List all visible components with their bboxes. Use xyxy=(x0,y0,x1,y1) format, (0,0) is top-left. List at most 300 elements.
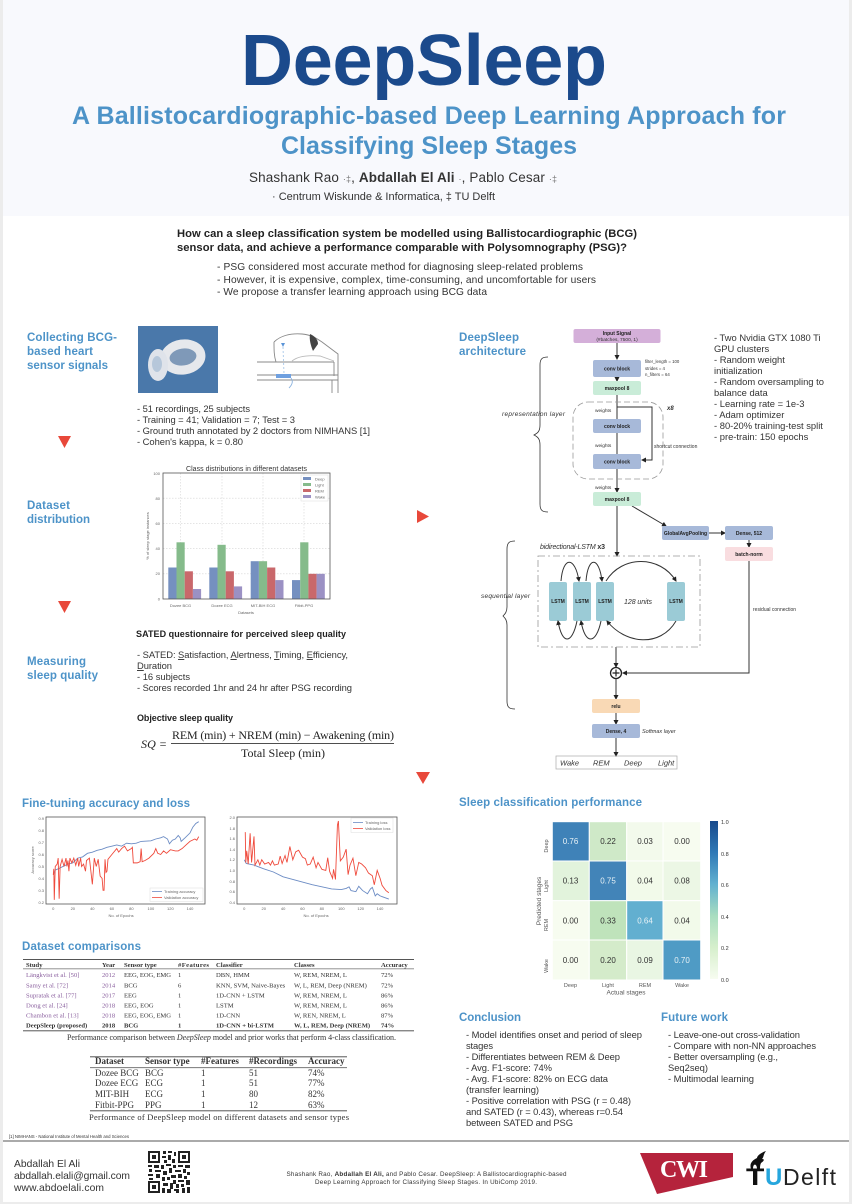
confusion matrix heatmap: Actual stages xyxy=(606,990,646,996)
table: prior work comparison: Classes xyxy=(294,962,315,969)
line chart: loss: 0.6 xyxy=(229,889,236,894)
table: prior work comparison: Sensor type xyxy=(124,962,157,969)
table: prior work comparison: 2018 xyxy=(102,1022,116,1030)
table: model performance by dataset: #Recordings xyxy=(249,1056,297,1066)
bidirectional LSTM block: LSTM xyxy=(598,599,612,605)
objective sleep quality formula: SQ = xyxy=(141,737,167,751)
introduction bullets: - We propose a transfer learning approach using BCG data xyxy=(217,287,487,298)
conclusion: - Avg. F1-score: 74% xyxy=(466,1062,552,1073)
heading: collecting signals: sensor signals xyxy=(27,360,108,372)
line chart: loss: 120 xyxy=(357,906,365,911)
global average pooling branch: Dense, 512 xyxy=(736,531,762,537)
training details bullets xyxy=(714,332,824,442)
future work xyxy=(661,1012,816,1084)
SATED text block xyxy=(136,629,352,693)
confusion matrix heatmap: 0.22 xyxy=(600,837,616,846)
sequential layer brace: sequential layer xyxy=(481,593,531,600)
table: prior work comparison: BCG xyxy=(124,1022,138,1030)
training details bullets: - 80-20% training-test split xyxy=(714,420,823,431)
training details bullets: initialization xyxy=(714,365,762,376)
global average pooling branch: GlobalAvgPooling xyxy=(664,531,707,537)
table: model performance by dataset xyxy=(89,1056,349,1122)
table: model performance by dataset: 74% xyxy=(308,1068,325,1078)
line chart: accuracy: 0.3 xyxy=(38,888,45,893)
header band xyxy=(3,0,849,216)
arrow: down 1 xyxy=(58,436,71,448)
line chart: loss: 1.0 xyxy=(229,868,236,873)
confusion matrix heatmap: 0.04 xyxy=(637,876,653,886)
conclusion: - Differentiates between REM & Deep xyxy=(466,1051,620,1062)
confusion matrix heatmap: Wake xyxy=(544,959,550,973)
sensor data bullets: - Training = 41; Validation = 7; Test = 3 xyxy=(137,414,295,425)
line chart: accuracy: 80 xyxy=(129,906,134,911)
contact details xyxy=(13,1159,130,1194)
line chart: accuracy: 20 xyxy=(71,906,76,911)
table: model performance by dataset: 82% xyxy=(308,1089,325,1099)
input signal block: (#batches, 7500, 1) xyxy=(596,337,638,343)
illustration: person on bed with sensor xyxy=(257,334,338,393)
table: prior work comparison: 2014 xyxy=(102,982,116,990)
line chart: loss: 60 xyxy=(300,906,305,911)
bar chart: class distributions: Fitbit-PPG xyxy=(295,603,313,608)
QR code xyxy=(148,1151,190,1193)
residual repeat box: conv block xyxy=(604,460,630,466)
line chart: loss xyxy=(229,815,397,918)
bar chart: class distributions: 80 xyxy=(156,496,161,501)
heading: collecting signals xyxy=(27,332,117,372)
bidirectional LSTM block: LSTM xyxy=(669,599,683,605)
table: prior work comparison: DBN, HMM xyxy=(216,972,250,979)
table: prior work comparison: 1 xyxy=(178,1022,181,1030)
line chart: loss: 20 xyxy=(261,906,267,911)
table: prior work comparison: EEG xyxy=(124,992,137,1000)
sensor data bullets: - Ground truth annotated by 2 doctors from NIMHANS [1] xyxy=(137,425,370,436)
confusion matrix heatmap: 0.8 xyxy=(721,852,729,858)
confusion matrix heatmap: 0.08 xyxy=(674,876,690,886)
confusion matrix heatmap: 0.03 xyxy=(637,837,653,846)
line chart: accuracy xyxy=(30,816,205,918)
heading: dataset distribution: distribution xyxy=(27,514,90,526)
arrow: down 2 xyxy=(58,601,71,613)
confusion matrix heatmap: 0.33 xyxy=(600,916,616,926)
table: prior work comparison: 1 xyxy=(178,972,181,979)
table: prior work comparison: Chambon et al. [13] xyxy=(26,1012,79,1020)
output classes: Light xyxy=(658,758,675,768)
heading: sleep classification: Sleep classification performance xyxy=(459,797,642,809)
table: prior work comparison: 1 xyxy=(178,1002,181,1010)
line chart: accuracy: 60 xyxy=(110,906,115,911)
line chart: accuracy: 0.4 xyxy=(38,876,45,881)
introduction bullets xyxy=(217,262,596,298)
table: prior work comparison xyxy=(23,959,414,1042)
table: model performance by dataset: Performance of DeepSleep model on different datasets and sensor types xyxy=(89,1112,349,1122)
conv block with parameters: conv block xyxy=(604,366,630,372)
table: prior work comparison: 87% xyxy=(381,1012,394,1020)
table: model performance by dataset: 1 xyxy=(201,1078,206,1088)
table: model performance by dataset: Dozee ECG xyxy=(95,1078,139,1088)
table: model performance by dataset: BCG xyxy=(145,1068,164,1078)
heading: measuring sleep quality: Measuring xyxy=(27,656,86,668)
bar chart: class distributions: Dozee ECG xyxy=(211,603,233,608)
confusion matrix heatmap: 1.0 xyxy=(721,820,729,826)
bidirectional LSTM block: LSTM xyxy=(551,599,565,605)
conclusion xyxy=(459,1012,642,1128)
global average pooling branch xyxy=(662,526,796,613)
bar chart: class distributions: Light xyxy=(315,482,325,488)
future work: - Multimodal learning xyxy=(668,1073,754,1084)
confusion matrix heatmap: Light xyxy=(544,880,550,892)
bar chart: class distributions: REM xyxy=(315,488,324,494)
table: prior work comparison: W, REM, NREM, L xyxy=(294,972,347,979)
bar chart: class distributions xyxy=(145,466,330,615)
line chart: loss: 1.4 xyxy=(229,847,236,852)
confusion matrix heatmap: REM xyxy=(639,983,652,989)
bar chart: class distributions: 100 xyxy=(153,471,161,476)
table: model performance by dataset: Fitbit-PPG xyxy=(95,1100,135,1110)
table: prior work comparison: Dong et al. [24] xyxy=(26,1002,68,1010)
future work: Future work xyxy=(661,1012,729,1024)
table: model performance by dataset: ECG xyxy=(145,1089,164,1099)
table: prior work comparison: 72% xyxy=(381,972,394,979)
line chart: accuracy: 0.6 xyxy=(38,852,45,857)
maxpool block top xyxy=(593,381,641,395)
contact details: www.abdoelali.com xyxy=(13,1183,104,1194)
logo: TU Delft: Delft xyxy=(783,1164,837,1190)
bar chart: class distributions: Class distributions in different datasets xyxy=(186,466,308,473)
confusion matrix heatmap: Deep xyxy=(544,839,550,853)
conclusion: between SATED and PSG xyxy=(466,1117,573,1128)
logo: CWI xyxy=(640,1153,733,1194)
training details bullets: - Adam optimizer xyxy=(714,409,784,420)
global average pooling branch: residual connection xyxy=(753,607,796,613)
bar chart: class distributions: 40 xyxy=(156,546,161,551)
table: prior work comparison: W, L, REM, Deep (NREM) xyxy=(294,1022,370,1030)
heading: dataset comparisons: Dataset comparisons xyxy=(22,941,141,953)
heading: architecture xyxy=(459,332,526,358)
table: model performance by dataset: 1 xyxy=(201,1068,206,1078)
contact details: Abdallah El Ali xyxy=(14,1159,80,1170)
table: prior work comparison: Year xyxy=(102,962,115,969)
representation layer brace xyxy=(502,357,566,512)
future work: - Better oversampling (e.g., xyxy=(668,1051,778,1062)
line chart: loss: 0 xyxy=(243,906,246,911)
bar chart: class distributions: % of sleep stage instances xyxy=(145,512,150,560)
sensor data bullets: - Cohen's kappa, k = 0.80 xyxy=(137,436,243,447)
table: prior work comparison: 2017 xyxy=(102,992,116,1000)
table: model performance by dataset: Sensor type xyxy=(145,1056,190,1066)
heading: fine tuning: Fine-tuning accuracy and loss xyxy=(22,798,190,810)
bar chart: class distributions: Wake xyxy=(315,494,326,500)
table: prior work comparison: 1D-CNN + bi-LSTM xyxy=(216,1022,275,1030)
confusion matrix heatmap: 0.64 xyxy=(637,916,653,926)
table: prior work comparison: 74% xyxy=(381,1022,394,1030)
output classes xyxy=(556,756,677,769)
bidirectional LSTM block xyxy=(538,544,700,647)
bar chart: class distributions: 60 xyxy=(156,521,161,526)
line chart: accuracy: 0.8 xyxy=(38,828,45,833)
heading: collecting signals: Collecting BCG- xyxy=(27,332,117,344)
confusion matrix heatmap: 0.13 xyxy=(563,876,579,886)
table: model performance by dataset: ECG xyxy=(145,1078,164,1088)
confusion matrix heatmap: 0.2 xyxy=(721,946,729,952)
residual repeat box: x8 xyxy=(666,406,674,412)
confusion matrix heatmap: 0.00 xyxy=(563,916,579,926)
conclusion: (transfer learning) xyxy=(466,1084,539,1095)
input signal block: Input Signal xyxy=(603,331,632,337)
research question: sensor data, and achieve a performance comparable with Polysomnography (PSG)? xyxy=(177,242,627,254)
residual repeat box: shortcut connection xyxy=(654,444,698,450)
bar chart: class distributions: Deep xyxy=(315,476,325,482)
training details bullets: GPU clusters xyxy=(714,343,770,354)
conv block with parameters: n_filters = 64 xyxy=(645,372,670,377)
line chart: accuracy: 100 xyxy=(148,906,155,911)
line chart: accuracy: 40 xyxy=(90,906,95,911)
table: prior work comparison: #Features xyxy=(178,962,209,969)
confusion matrix heatmap: Deep xyxy=(564,983,577,989)
table: prior work comparison: W, REM, NREM, L xyxy=(294,1002,347,1010)
maxpool block bottom xyxy=(593,485,641,506)
bar chart: class distributions: 0 xyxy=(158,596,161,602)
sensor data bullets xyxy=(137,403,370,447)
training details bullets: - Learning rate = 1e-3 xyxy=(714,398,804,409)
table: prior work comparison: W, REN, NREM, L xyxy=(294,1012,346,1020)
heading: dataset distribution: Dataset xyxy=(27,500,70,512)
bidirectional LSTM block: bidirectional-LSTM x3 xyxy=(540,544,605,551)
line chart: loss: 0.8 xyxy=(229,879,236,884)
table: model performance by dataset: Accuracy xyxy=(308,1056,345,1066)
input signal block xyxy=(574,329,660,343)
confusion matrix heatmap: 0.75 xyxy=(600,876,616,886)
training details bullets: - Random oversampling to xyxy=(714,376,824,387)
confusion matrix heatmap xyxy=(536,820,729,996)
line chart: loss: 1.2 xyxy=(229,857,236,862)
future work: - Compare with non-NN approaches xyxy=(668,1040,816,1051)
conclusion: Conclusion xyxy=(459,1012,521,1024)
confusion matrix heatmap: Light xyxy=(602,983,614,989)
residual repeat box: weights xyxy=(595,443,612,449)
table: model performance by dataset: Dataset xyxy=(95,1056,124,1066)
arrow: right xyxy=(417,510,429,523)
introduction bullets: - PSG considered most accurate method for diagnosing sleep-related problems xyxy=(217,262,583,273)
confusion matrix heatmap: REM xyxy=(544,918,550,931)
table: prior work comparison: DeepSleep (proposed) xyxy=(26,1022,87,1030)
research question: How can a sleep classification system be modelled using Ballistocardiographic (BCG) xyxy=(177,228,637,240)
table: prior work comparison: EEG, EOG, EMG xyxy=(124,1012,171,1020)
table: model performance by dataset: PPG xyxy=(145,1100,162,1110)
citation: Deep Learning Approach for Classifying Sleep Stages. In UbiComp 2019. xyxy=(315,1179,537,1186)
table: prior work comparison: 2012 xyxy=(102,972,115,979)
line chart: loss: No. of Epochs xyxy=(303,913,329,918)
table: model performance by dataset: 1 xyxy=(201,1100,206,1110)
authors: Shashank Rao ·‡, Abdallah El Ali ·, Pablo Cesar ·‡ xyxy=(249,170,557,185)
bar chart: class distributions: Dozee BCG xyxy=(170,603,191,608)
conclusion: stages xyxy=(466,1040,493,1051)
confusion matrix heatmap: 0.70 xyxy=(674,956,690,965)
SATED text block: - SATED: Satisfaction, Alertness, Timing, Efficiency, xyxy=(137,649,348,660)
add node xyxy=(610,668,622,678)
table: prior work comparison: 1D-CNN + LSTM xyxy=(216,992,265,1000)
confusion matrix heatmap: 0.20 xyxy=(600,956,616,965)
table: prior work comparison: 1 xyxy=(178,992,181,1000)
line chart: accuracy: Training accuracy xyxy=(164,889,195,894)
table: prior work comparison: 2018 xyxy=(102,1002,116,1010)
subtitle: Classifying Sleep Stages xyxy=(281,132,577,160)
bidirectional LSTM block: LSTM xyxy=(575,599,589,605)
sequential layer brace xyxy=(481,541,531,709)
table: model performance by dataset: 51 xyxy=(249,1068,258,1078)
heading: dataset distribution xyxy=(27,500,90,526)
table: prior work comparison: 72% xyxy=(381,982,394,990)
logo: TU Delft: U xyxy=(765,1164,782,1191)
table: prior work comparison: 86% xyxy=(381,992,394,1000)
table: prior work comparison: 86% xyxy=(381,1002,394,1010)
heading: measuring sleep quality xyxy=(27,656,99,682)
conv block with parameters: strides = 4 xyxy=(645,366,666,371)
line chart: accuracy: 0.9 xyxy=(38,816,45,821)
residual repeat box: conv block xyxy=(604,424,630,430)
representation layer brace: representation layer xyxy=(502,411,566,418)
line chart: accuracy: 0.2 xyxy=(38,900,45,905)
SATED text block: - Scores recorded 1hr and 24 hr after PSG recording xyxy=(137,682,352,693)
table: model performance by dataset: 63% xyxy=(308,1100,325,1110)
table: prior work comparison: 1 xyxy=(178,1012,181,1020)
softmax dense block: Softmax layer xyxy=(642,729,677,735)
objective sleep quality formula xyxy=(137,713,394,760)
conv block with parameters xyxy=(593,359,680,377)
table: model performance by dataset: 51 xyxy=(249,1078,258,1088)
table: prior work comparison: EEG, EOG, EMG xyxy=(124,972,171,979)
softmax dense block xyxy=(592,724,677,738)
table: prior work comparison: W, L, REM, Deep (NREM) xyxy=(294,982,367,990)
conclusion: - Model identifies onset and period of sleep xyxy=(466,1029,642,1040)
logo: CWI: CWI xyxy=(660,1157,708,1183)
table: model performance by dataset: 1 xyxy=(201,1089,206,1099)
table: prior work comparison: Classifier xyxy=(216,962,243,969)
table: prior work comparison: Accuracy xyxy=(381,962,408,969)
subtitle: A Ballistocardiographic-based Deep Learning Approach for xyxy=(72,102,786,130)
introduction bullets: - However, it is expensive, complex, time-consuming, and uncomfortable for users xyxy=(217,275,596,286)
line chart: loss: 80 xyxy=(320,906,325,911)
heading: architecture: architecture xyxy=(459,346,526,358)
maxpool block bottom: weights xyxy=(595,485,612,491)
confusion matrix heatmap: 0.76 xyxy=(563,837,579,846)
table: model performance by dataset: Dozee BCG xyxy=(95,1068,139,1078)
line chart: accuracy: 0 xyxy=(52,906,55,911)
table: prior work comparison: 1D-CNN xyxy=(216,1012,240,1020)
confusion matrix heatmap: 0.6 xyxy=(721,883,729,889)
confusion matrix heatmap: 0.04 xyxy=(674,916,690,926)
architecture diagram xyxy=(481,329,796,769)
relu block xyxy=(592,699,640,713)
future work: - Leave-one-out cross-validation xyxy=(668,1029,800,1040)
line chart: loss: Training loss xyxy=(365,820,388,825)
confusion matrix heatmap: Predicted stages xyxy=(536,876,543,925)
line chart: loss: 1.6 xyxy=(229,836,236,841)
residual repeat box xyxy=(573,402,698,479)
objective sleep quality formula: Total Sleep (min) xyxy=(241,746,325,760)
line chart: loss: 40 xyxy=(281,906,286,911)
sensor data bullets: - 51 recordings, 25 subjects xyxy=(137,403,250,414)
conclusion: and SATED (r = 0.43), whereas r=0.54 xyxy=(466,1106,623,1117)
bar chart: class distributions: Datasets xyxy=(238,610,254,615)
maxpool block top: maxpool 8 xyxy=(605,386,630,392)
table: prior work comparison: Study xyxy=(26,962,43,969)
heading: measuring sleep quality: sleep quality xyxy=(27,670,99,682)
table: prior work comparison: W, REM, NREM, L xyxy=(294,992,347,1000)
output classes: Deep xyxy=(624,758,642,768)
line chart: accuracy: No. of Epochs xyxy=(108,913,134,918)
contact details: abdallah.elali@gmail.com xyxy=(14,1171,130,1182)
table: prior work comparison: 2018 xyxy=(102,1012,116,1020)
future work: Seq2seq) xyxy=(668,1062,708,1073)
softmax dense block: Dense, 4 xyxy=(606,729,626,735)
objective sleep quality formula: REM (min) + NREM (min) − Awakening (min) xyxy=(172,728,394,742)
table: prior work comparison: Längkvist et al. [50] xyxy=(26,972,79,979)
objective sleep quality formula: Objective sleep quality xyxy=(137,713,233,723)
photo: BCG sensor xyxy=(138,326,218,393)
confusion matrix heatmap: 0.00 xyxy=(674,837,690,846)
table: prior work comparison: 6 xyxy=(178,982,182,990)
confusion matrix heatmap: 0.0 xyxy=(721,978,729,984)
confusion matrix heatmap: 0.09 xyxy=(637,956,653,965)
table: model performance by dataset: #Features xyxy=(201,1056,239,1066)
authors xyxy=(249,170,557,203)
confusion matrix heatmap: 0.00 xyxy=(563,956,579,965)
line chart: accuracy: 0.5 xyxy=(38,864,45,869)
logo: TU Delft: T xyxy=(746,1163,765,1190)
footnote: [1] NIMHANS - National Institute of Mental Health and Sciences xyxy=(9,1134,129,1139)
citation xyxy=(286,1171,567,1186)
table: model performance by dataset: 80 xyxy=(249,1089,258,1099)
SATED text block: Duration xyxy=(137,660,172,671)
heading: collecting signals: based heart xyxy=(27,346,93,358)
confusion matrix heatmap: 0.4 xyxy=(721,915,729,921)
conclusion: - Positive correlation with PSG (r = 0.48) xyxy=(466,1095,631,1106)
title: DeepSleep xyxy=(241,21,607,101)
residual repeat box: weights xyxy=(595,408,612,414)
training details bullets: - pre-train: 150 epochs xyxy=(714,431,809,442)
table: model performance by dataset: MIT-BIH xyxy=(95,1089,130,1099)
SATED text block: - 16 subjects xyxy=(137,671,190,682)
line chart: accuracy: Validation accuracy xyxy=(164,895,198,900)
conclusion: - Avg. F1-score: 82% on ECG data xyxy=(466,1073,609,1084)
SATED text block: SATED questionnaire for perceived sleep quality xyxy=(136,629,346,639)
authors: · Centrum Wiskunde & Informatica, ‡ TU Delft xyxy=(272,191,495,203)
table: prior work comparison: Performance comparison between DeepSleep model and prior works that perform 4-class classification. xyxy=(67,1033,396,1042)
heading: architecture: DeepSleep xyxy=(459,332,519,344)
line chart: accuracy: 140 xyxy=(187,906,194,911)
confusion matrix heatmap: Wake xyxy=(675,983,689,989)
bar chart: class distributions: MIT-BIH ECG xyxy=(251,603,275,608)
line chart: accuracy: Accuracy score xyxy=(30,846,35,874)
line chart: accuracy: 120 xyxy=(167,906,175,911)
connectors xyxy=(616,343,749,756)
training details bullets: - Two Nvidia GTX 1080 Ti xyxy=(714,332,821,343)
line chart: accuracy: 0.7 xyxy=(38,840,45,845)
line chart: loss: 140 xyxy=(377,906,384,911)
conv block with parameters: filter_length = 100 xyxy=(645,359,680,364)
maxpool block bottom: maxpool 8 xyxy=(605,497,630,503)
logo: TU Delft xyxy=(746,1151,837,1191)
table: model performance by dataset: 12 xyxy=(249,1100,258,1110)
research question xyxy=(177,228,637,254)
relu block: relu xyxy=(611,704,621,710)
training details bullets: - Random weight xyxy=(714,354,785,365)
bidirectional LSTM block: 128 units xyxy=(624,599,652,606)
table: prior work comparison: EEG, EOG xyxy=(124,1002,154,1010)
global average pooling branch: batch-norm xyxy=(735,552,763,558)
table: model performance by dataset: 77% xyxy=(308,1078,325,1088)
